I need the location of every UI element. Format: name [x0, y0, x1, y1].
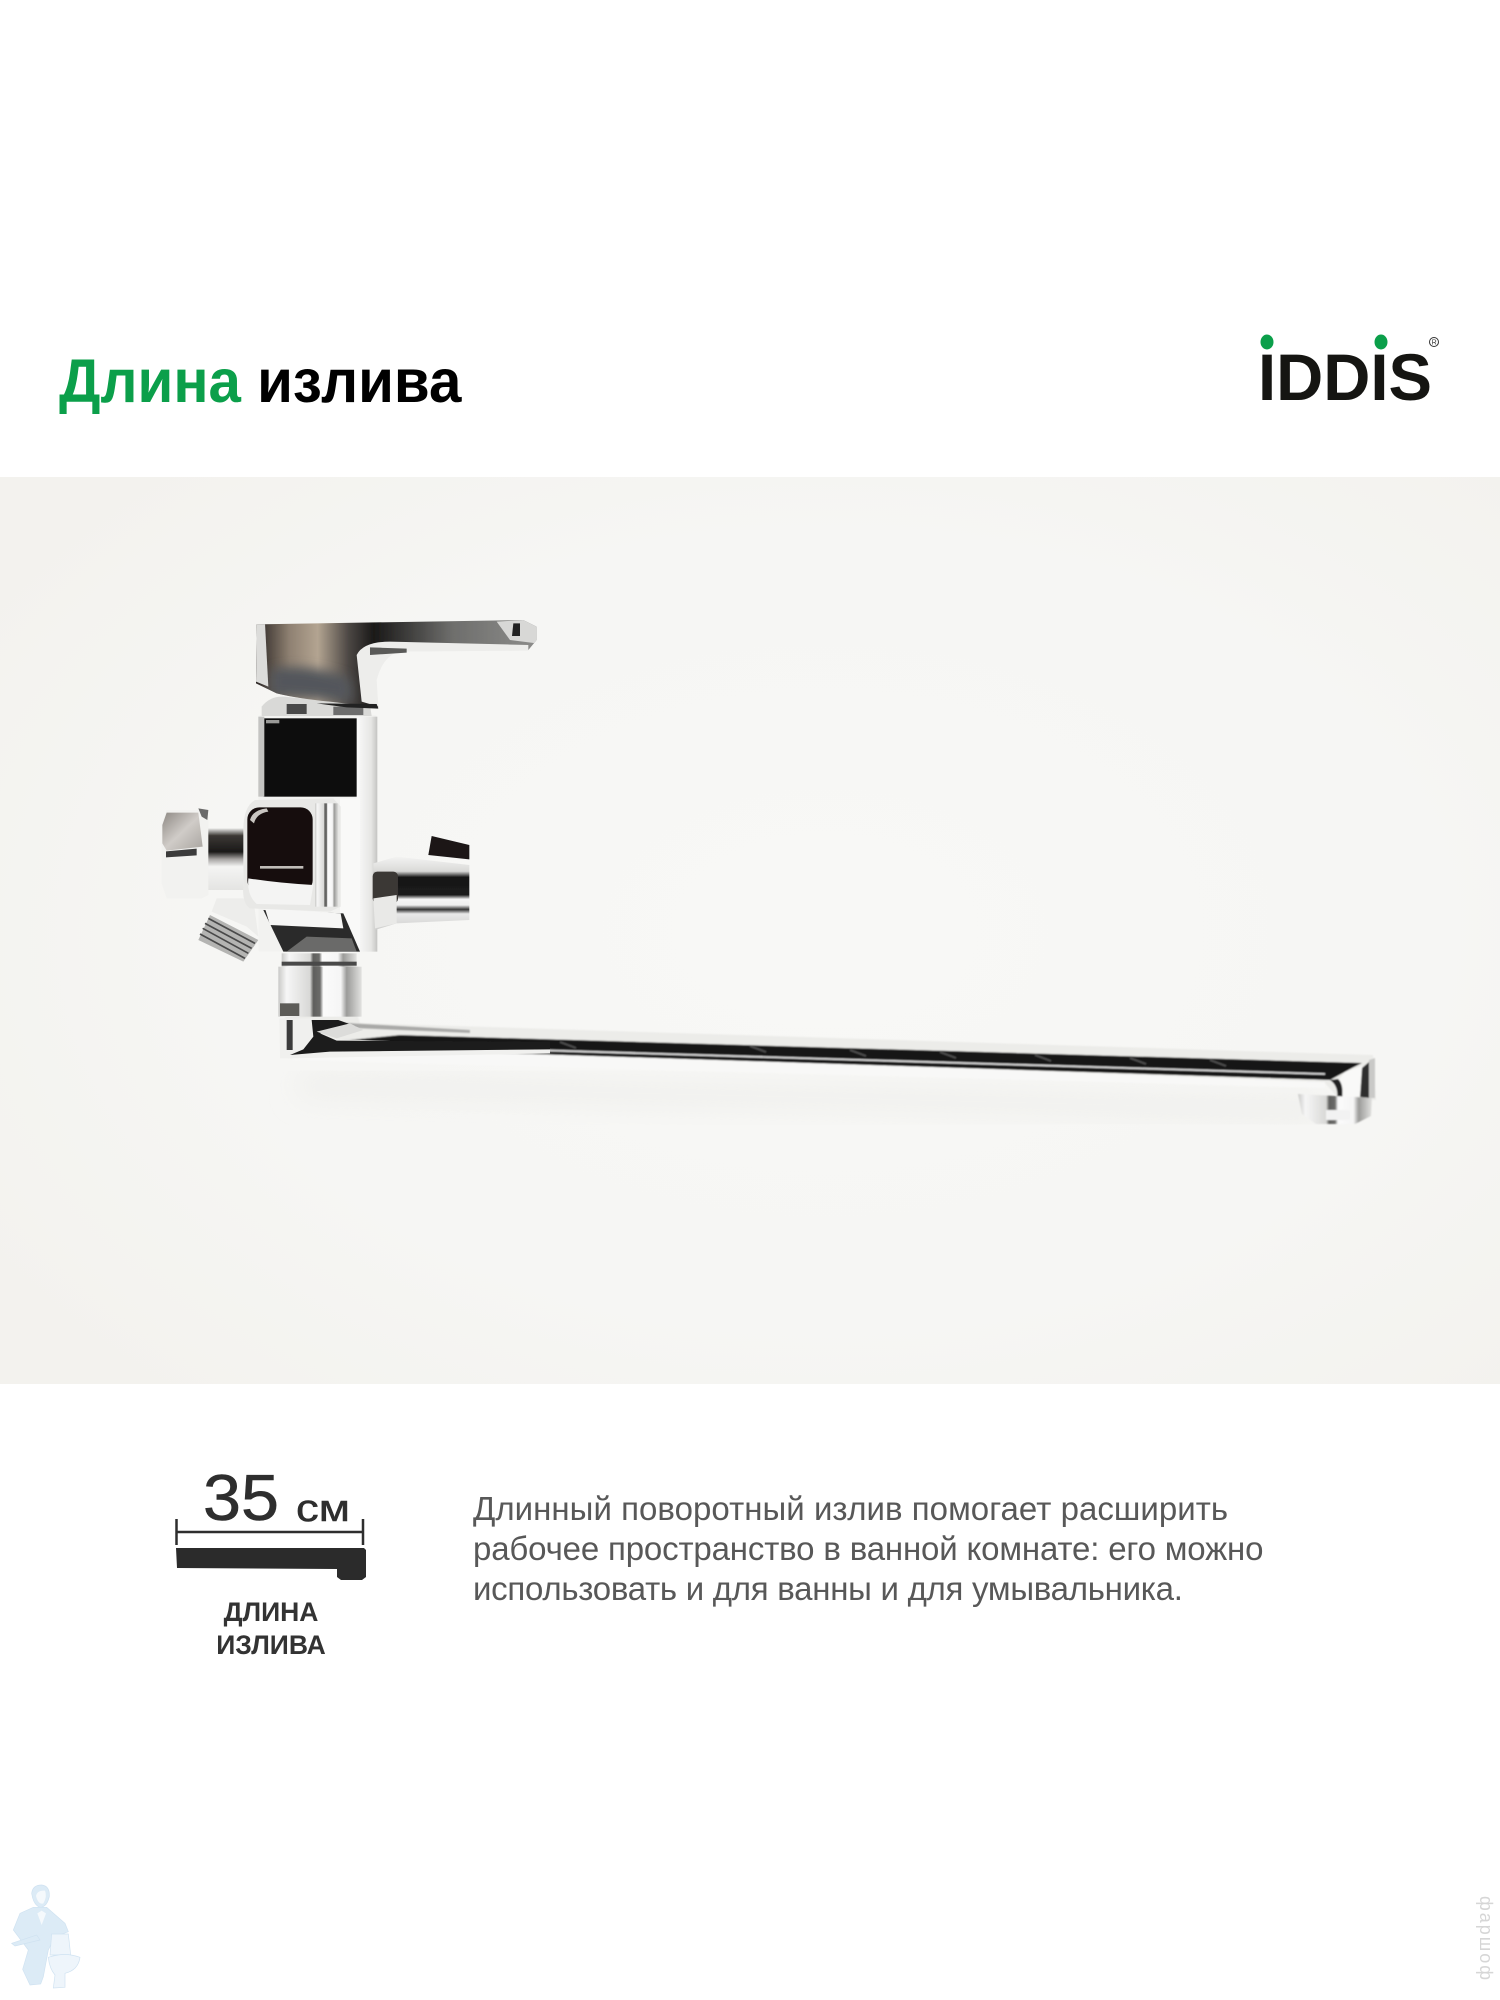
faucet illustration	[162, 620, 1376, 1125]
lever handle	[256, 620, 537, 707]
mixer body	[162, 620, 550, 1058]
watermark: plumber	[11, 1884, 80, 1988]
icon caption: ИЗЛИВА	[216, 1630, 326, 1660]
shadow	[300, 1075, 1320, 1120]
main body	[258, 715, 377, 952]
spout silhouette	[176, 1548, 366, 1580]
hex nut	[162, 810, 208, 898]
watermark: vertical text: фаршоф	[1476, 1896, 1496, 1982]
description text: рабочее пространство в ванной комнате: его можно	[473, 1530, 1263, 1567]
dimension line	[176, 1519, 363, 1545]
thread	[198, 915, 258, 962]
neck under handle	[262, 697, 372, 716]
description text: Длинный поворотный излив помогает расширить	[473, 1490, 1228, 1527]
spout length icon	[175, 1465, 366, 1580]
unit cm: см	[296, 1488, 350, 1530]
logo: IDDIS: R	[1432, 340, 1437, 346]
lower body	[263, 910, 360, 952]
spout	[285, 1008, 1376, 1124]
icon caption	[216, 1597, 326, 1660]
centre block	[243, 798, 341, 912]
product photo panel	[0, 477, 1500, 1384]
elbow	[279, 1018, 550, 1058]
description text	[473, 1490, 1263, 1607]
nozzle	[1298, 1094, 1372, 1124]
swivel	[278, 967, 362, 1017]
icon caption: ДЛИНА	[224, 1597, 318, 1627]
shower holder	[428, 836, 469, 859]
connector neck	[203, 828, 243, 890]
title: Длина излива	[59, 347, 461, 415]
description text: использовать и для ванны и для умывальника.	[473, 1570, 1183, 1607]
